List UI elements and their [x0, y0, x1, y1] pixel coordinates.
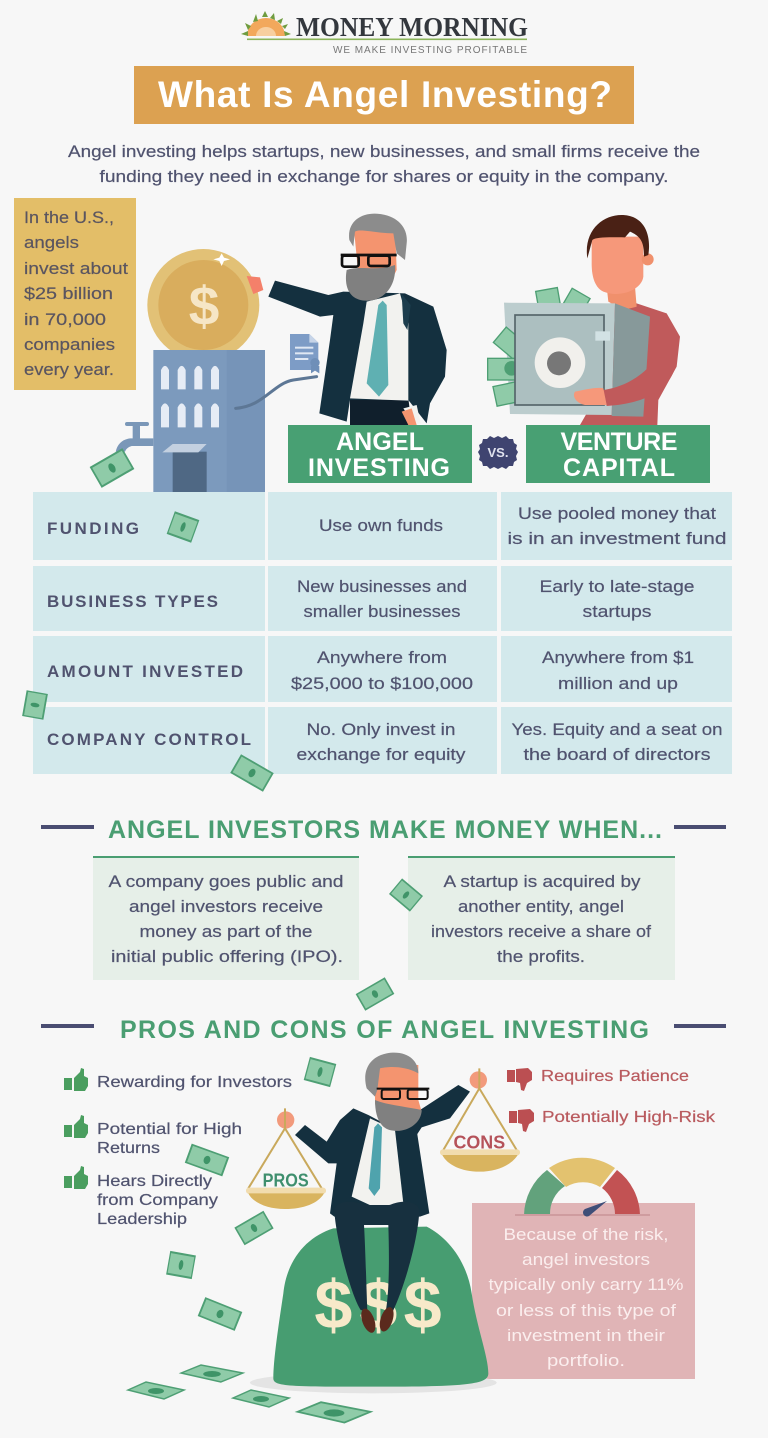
panel: company goes public: initial public offering (IPO). — [111, 947, 343, 966]
comparison table: COMPANY CONTROL — [47, 730, 251, 749]
panel: startup is acquired — [408, 856, 675, 980]
comparison table — [33, 492, 732, 774]
logo: Money Morning — [241, 11, 528, 56]
callout: angels invest statistic: every year. — [24, 360, 114, 379]
list: pros: from Company — [97, 1192, 218, 1209]
illustration: investor on money bag with scales: PROS — [263, 1170, 309, 1191]
panel: company goes public: A company goes public and — [108, 872, 344, 891]
panel: risk note: typically only carry 11% — [488, 1275, 684, 1294]
heading banner: venture capital: CAPITAL — [563, 454, 675, 482]
illustration: angel investor — [247, 214, 447, 425]
illustration: investor on money bag with scales — [246, 1053, 520, 1393]
comparison table: Early to late-stage — [540, 577, 694, 596]
badge: vs — [478, 436, 518, 469]
callout: angels invest statistic: companies — [24, 335, 115, 354]
heading banner: venture capital: VENTURE — [560, 428, 678, 456]
comparison table: Yes. Equity and a seat on — [512, 720, 722, 739]
logo: Money Morning: MONEY MORNING — [296, 12, 528, 42]
panel: risk note: investment in their — [507, 1326, 665, 1345]
panel: risk note: angel investors — [522, 1250, 650, 1269]
comparison table: smaller businesses — [304, 602, 460, 621]
illustration: investor on money bag with scales: $ — [314, 1267, 352, 1343]
comparison table: New businesses and — [297, 577, 467, 596]
comparison table: $25,000 to $100,000 — [291, 674, 473, 693]
list: cons — [507, 1068, 716, 1132]
illustration: investor on money bag with scales: $ — [359, 1267, 397, 1343]
callout: angels invest statistic: invest about — [24, 259, 128, 278]
heading: pros and cons: PROS AND CONS OF ANGEL INVESTING — [120, 1016, 649, 1044]
comparison table: BUSINESS TYPES — [47, 592, 218, 611]
comparison table: AMOUNT INVESTED — [47, 662, 243, 681]
callout: angels invest statistic — [14, 198, 136, 390]
list: pros: Hears Directly — [97, 1173, 212, 1190]
list: pros: Leadership — [97, 1211, 187, 1228]
illustration: building with coin and faucet — [116, 249, 320, 492]
intro text: Angel investing helps startups, new businesses, and small firms receive the — [68, 142, 700, 161]
illustration: venture capitalist with safe — [488, 215, 680, 425]
title banner — [134, 66, 634, 124]
callout: angels invest statistic: $25 billion — [24, 284, 113, 303]
callout: angels invest statistic: In the U.S., — [24, 208, 114, 227]
panel: startup is acquired: investors receive a share of — [431, 922, 651, 941]
icons: floating bills around table — [23, 512, 273, 791]
intro text: funding they need in exchange for shares or equity in the company. — [100, 167, 668, 186]
list: pros: Returns — [97, 1140, 160, 1157]
panel: risk note: or less of this type of — [496, 1301, 676, 1320]
comparison table: startups — [582, 602, 652, 621]
list: pros — [64, 1068, 292, 1228]
panel: risk note: portfolio. — [547, 1351, 625, 1370]
comparison table: million and up — [558, 674, 678, 693]
panel: risk note: Because of the risk, — [504, 1225, 668, 1244]
panel: startup is acquired: the profits. — [497, 947, 585, 966]
list: cons: Requires Patience — [541, 1068, 689, 1085]
callout: angels invest statistic: angels — [24, 233, 79, 252]
comparison table: Use own funds — [319, 516, 443, 535]
comparison table: Anywhere from $1 — [542, 648, 694, 667]
heading banner: angel investing: ANGEL — [336, 428, 424, 456]
heading banner: angel investing — [288, 425, 472, 483]
comparison table: Anywhere from — [317, 648, 447, 667]
comparison table: Use pooled money that — [518, 504, 716, 523]
icon: risk gauge — [515, 1158, 650, 1217]
icons: falling bills — [128, 1058, 370, 1423]
heading banner: angel investing: INVESTING — [308, 454, 450, 482]
panel: company goes public: angel investors receive — [129, 897, 323, 916]
list: cons: Potentially High-Risk — [542, 1109, 716, 1126]
title banner: What Is Angel Investing? — [158, 74, 612, 115]
comparison table: FUNDING — [47, 519, 139, 538]
illustration: investor on money bag with scales: CONS — [453, 1132, 505, 1153]
intro text — [68, 142, 700, 186]
logo: Money Morning: WE MAKE INVESTING PROFITABLE — [333, 45, 527, 56]
list: pros: Potential for High — [97, 1121, 242, 1138]
comparison table: No. Only invest in — [306, 720, 456, 739]
badge: vs: VS. — [488, 445, 508, 460]
icons: floating bills between panels — [357, 879, 422, 1010]
icon: falling bill under faucet — [91, 449, 133, 487]
illustration: building with coin and faucet: $ — [189, 275, 219, 337]
callout: angels invest statistic: in 70,000 — [24, 310, 106, 329]
panel: startup is acquired: another entity, angel — [458, 897, 624, 916]
comparison table: the board of directors — [524, 745, 710, 764]
illustration: investor on money bag with scales: $ — [404, 1267, 442, 1343]
heading: angel investors make money when: ANGEL INVESTORS MAKE MONEY WHEN... — [108, 816, 662, 844]
panel: risk note — [472, 1203, 695, 1379]
panel: startup is acquired: A startup is acquired by — [444, 872, 641, 891]
panel: company goes public — [93, 856, 359, 980]
comparison table: is in an investment fund — [508, 529, 726, 548]
heading banner: venture capital — [526, 425, 710, 483]
panel: company goes public: money as part of the — [140, 922, 312, 941]
list: pros: Rewarding for Investors — [97, 1074, 292, 1091]
comparison table: exchange for equity — [296, 745, 466, 764]
